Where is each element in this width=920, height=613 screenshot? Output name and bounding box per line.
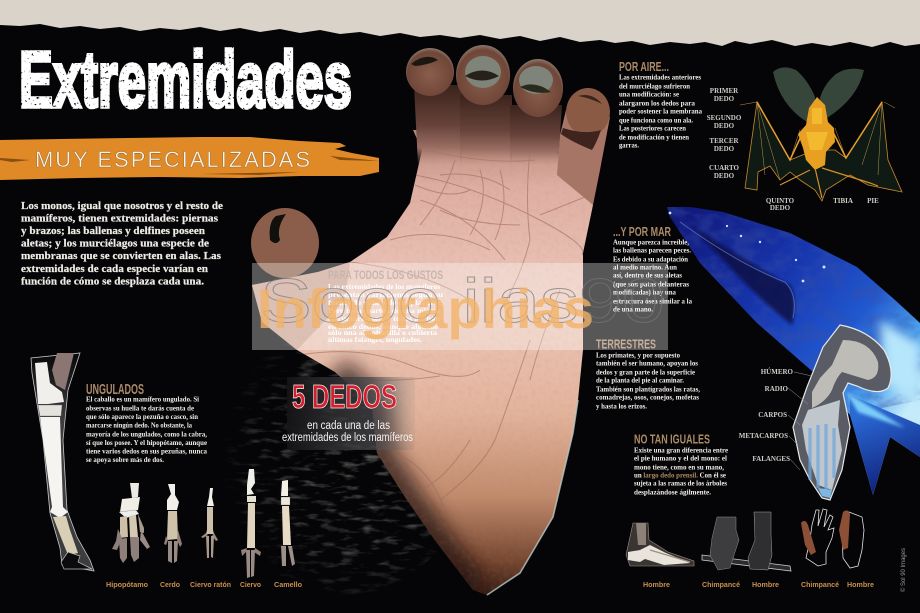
intro text: mamíferos, tienen extremidades: piernas: [21, 214, 218, 224]
wings: [745, 102, 902, 201]
panel: terrestres: TERRESTRES: [596, 336, 656, 352]
panel: por aire: garras.: [619, 140, 639, 150]
panel: para todos los gustos: presentan variaciones según su: [328, 290, 444, 299]
flipper skeleton: [793, 325, 891, 500]
panel: no tan iguales: un largo dedo prensil. Con él se: [634, 470, 726, 480]
bat labels: QUINTO: [766, 197, 795, 205]
photo: foot: [251, 45, 610, 595]
bat labels: TIBIA: [833, 197, 853, 205]
flipper labels: HÚMERO: [761, 368, 794, 376]
illustration: deer limb: [241, 469, 261, 578]
intro text: [21, 201, 223, 288]
panel: para todos los gustos: sólo una almohadilla o cubierta: [328, 328, 437, 337]
panel: para todos los gustos: Pero todas parten de una misma: [328, 306, 440, 315]
panel: ungulados: marcarse ningún dedo. No obstante, la: [86, 420, 192, 430]
panel: terrestres: [596, 336, 700, 410]
panel: y por mar: al medio marino. Aun: [613, 262, 678, 272]
species labels: Ciervo ratón: [190, 580, 231, 589]
body: [798, 97, 835, 170]
copyright: © Sol 90 Images: [900, 548, 907, 592]
panel: y por mar: de una mano.: [613, 304, 653, 314]
panel: por aire: Las posteriores carecen: [619, 124, 687, 132]
callout: 5 dedos: en cada una de las: [307, 420, 390, 432]
palm wrinkles: [300, 150, 590, 510]
intro text: y brazos; las ballenas y delfines poseen: [21, 226, 205, 237]
intro text: función de cómo se desplaza cada una.: [21, 276, 204, 288]
panel: para todos los gustos: últimas falanges, ungulados.: [328, 335, 422, 344]
panel: y por mar: [613, 224, 692, 314]
panel: ungulados: que sólo aparece la pezuña o casco, sin: [86, 412, 199, 421]
comparison labels: Hombre: [847, 580, 874, 589]
species labels: [106, 580, 303, 589]
panel: ungulados: UNGULADOS: [86, 382, 144, 398]
panel: terrestres: comadrejas, osos, conejos, mofetas: [596, 392, 699, 402]
panel: por aire: que funciona como un ala.: [619, 116, 693, 124]
comparison labels: Hombre: [643, 580, 670, 589]
watermark: Infographias: [257, 277, 594, 340]
torn paper top band: [0, 0, 920, 47]
toe 2: [456, 45, 512, 165]
panel: por aire: alargaron los dedos para: [619, 98, 695, 108]
bat labels: TERCER: [709, 137, 740, 145]
bat labels: DEDO: [714, 172, 735, 180]
callout: 5 dedos: 5 DEDOS: [292, 378, 397, 415]
panel: y por mar: modificadas) hay una: [613, 288, 676, 296]
panel: no tan iguales: sujeta a las ramas de los árboles: [634, 478, 727, 488]
bat labels: SEGUNDO: [707, 114, 742, 122]
bat labels: PRIMER: [710, 87, 739, 95]
title: Extremidades: [19, 35, 352, 124]
panel: ungulados: mayoría de los ungulados, como la cabra,: [86, 430, 207, 438]
illustration: horse leg: [31, 353, 94, 571]
panel: y por mar: Aunque parezca increíble,: [613, 238, 689, 246]
comparison labels: Hombre: [752, 580, 779, 589]
flipper labels: METACARPOS: [739, 432, 788, 440]
panel: por aire: Las extremidades anteriores: [619, 72, 701, 82]
bat labels: DEDO: [714, 95, 735, 103]
comparison labels: Chimpancé: [801, 580, 839, 589]
comparison labels: Chimpancé: [702, 580, 740, 589]
illustration: hippo limb: [112, 483, 150, 563]
panel: y por mar: las ballenas parecen peces.: [613, 246, 691, 254]
illustration: bat x-ray: [707, 67, 902, 212]
panel: no tan iguales: Existe una gran diferencia entre: [634, 446, 728, 454]
toe 3: [510, 59, 563, 165]
hair of the leg: [230, 352, 436, 594]
watermark: [252, 263, 668, 350]
panel: y por mar: (que son patas delanteras: [613, 280, 689, 288]
illustration: chimpanzee hand and human foot outlines: [801, 509, 864, 568]
callout: 5 dedos: [282, 377, 415, 450]
subtitle band: MUY ESPECIALIZADAS: [35, 147, 310, 172]
panel: para todos los gustos: [328, 268, 444, 344]
intro text: extremidades de cada especie varían en: [21, 264, 208, 275]
toe 4: [557, 88, 610, 205]
panel: terrestres: dedos y gran parte de la superficie: [596, 368, 695, 376]
bat labels: PIE: [867, 197, 879, 205]
panel: ungulados: sí que los posee. Y el hipopótamo, aunque: [86, 438, 207, 447]
intro text: Los monos, igual que nosotros y el resto de: [21, 201, 223, 212]
panel: ungulados: tiene varios dedos en sus pezuñas, nunca: [86, 446, 207, 456]
illustration: human foot skeleton: [626, 523, 694, 566]
panel: y por mar: ...Y POR MAR: [613, 224, 671, 239]
panel: por aire: poder sostener la membrana: [619, 106, 702, 116]
thumb: [251, 208, 319, 278]
panel: terrestres: de la planta del pie al caminar.: [596, 376, 684, 384]
illustration: whale: [667, 207, 920, 500]
bat labels: DEDO: [714, 122, 735, 130]
panel: por aire: [619, 59, 702, 150]
flipper labels: CARPOS: [758, 411, 787, 419]
panel: para todos los gustos: PARA TODOS LOS GUSTOS: [328, 268, 443, 282]
bat labels: DEDO: [770, 204, 791, 212]
panel: no tan iguales: mono tiene, como en su mano,: [634, 462, 724, 472]
species labels: Hipopótamo: [106, 580, 149, 589]
panel: y por mar: Es debido a su adaptación: [613, 254, 689, 264]
panel: para todos los gustos: Las extremidades de los mamíferos: [328, 282, 440, 291]
panel: ungulados: El caballo es un mamífero ungulado. Si: [86, 394, 200, 404]
toe 1: [406, 48, 462, 165]
illustration: chimpanzee and human gripping bar: [702, 512, 791, 571]
panel: terrestres: y hasta los erizos.: [596, 402, 647, 410]
illustration: camel limb: [281, 480, 295, 566]
callout: 5 dedos: extremidades de los mamíferos: [282, 432, 413, 444]
panel: no tan iguales: NO TAN IGUALES: [634, 432, 710, 446]
species labels: Ciervo: [240, 580, 262, 589]
panel: ungulados: [86, 382, 207, 464]
panel: y por mar: así, dentro de sus aletas: [613, 270, 682, 280]
panel: no tan iguales: [634, 432, 728, 496]
watermark: Sooo iias90: [260, 267, 665, 336]
panel: no tan iguales: el pie humano y el del mono: el: [634, 454, 728, 462]
bat labels: DEDO: [714, 145, 735, 153]
panel: para todos los gustos: en cinco dedos, aunque algunos: [328, 322, 438, 331]
rim light: [487, 400, 578, 595]
palm and sole: [252, 130, 593, 595]
panel: para todos los gustos: estructura ósea, y todas acaban: [328, 314, 441, 323]
bat labels: [707, 87, 879, 212]
panel: y por mar: estructura ósea similar a la: [613, 296, 692, 306]
panel: terrestres: Los primates, y por supuesto: [596, 350, 680, 360]
panel: por aire: de modificación y tienen: [619, 132, 690, 142]
panel: por aire: POR AIRE...: [619, 59, 669, 74]
flipper labels: [739, 368, 794, 463]
panel: ungulados: observas su huella te darás cuenta de: [86, 404, 194, 412]
panel: para todos los gustos: forma de vida y de desplazarse.: [328, 298, 443, 307]
intro text: aletas; y los murciélagos una especie de: [21, 238, 209, 250]
illustration: pig limb: [164, 484, 182, 563]
panel: ungulados: se apoya sobre más de dos.: [86, 455, 164, 464]
panel: por aire: del murciélago sufrieron: [619, 82, 691, 90]
subtitle band: [0, 137, 379, 180]
panel: terrestres: también el ser humano, apoyan los: [596, 358, 698, 368]
species labels: Camello: [274, 580, 303, 589]
species labels: Cerdo: [160, 580, 181, 589]
bat labels: CUARTO: [709, 164, 740, 172]
panel: por aire: una modificación: se: [619, 90, 679, 98]
flipper labels: FALANGES: [752, 455, 790, 463]
panel: no tan iguales: desplazándose ágilmente.: [634, 488, 711, 496]
intro text: membranas que se convierten en alas. Las: [21, 251, 221, 262]
ears: [773, 67, 864, 122]
illustration: mouse deer limb: [201, 488, 218, 558]
flipper labels: RADIO: [765, 385, 789, 393]
comparison labels: [643, 580, 874, 589]
panel: terrestres: También son plantígrados las ratas,: [596, 384, 700, 394]
